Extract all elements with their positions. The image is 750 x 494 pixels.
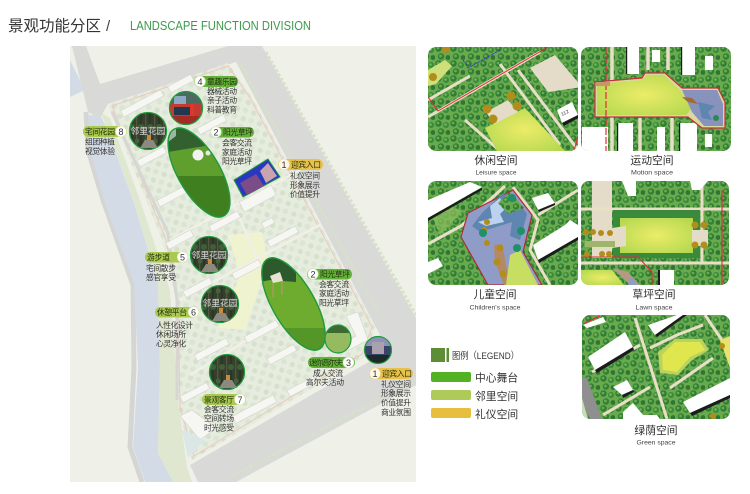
heading: motion space: Motion space [631, 170, 673, 176]
site west road [112, 112, 177, 400]
callout 3: mini golf: 成人交流 [313, 368, 343, 378]
photo circle: forest garden 5 [190, 236, 228, 274]
heading: children's space: 儿童空间 [473, 287, 517, 301]
callout 7: landscape lounge: 会客交流 [204, 404, 234, 414]
callout 6: rest platform: 心灵净化 [156, 338, 186, 348]
panel: children's space plan [428, 181, 578, 285]
callout 1: entrance north: 礼仪空间 [290, 170, 320, 180]
photo: entrance north [234, 159, 280, 197]
photo circle: forest garden 6: 邻里花园 [202, 297, 238, 308]
callout 8: home garden: 8 [118, 127, 124, 137]
title: LANDSCAPE FUNCTION DIVISION [130, 18, 311, 33]
callout 6: rest platform: 休闲场所 [156, 329, 186, 339]
callout 1: entrance south: 商业氛围 [381, 407, 411, 417]
heading: motion space [630, 153, 674, 176]
residential buildings [121, 74, 368, 440]
callout 5: walkway: 5 [180, 252, 185, 262]
callout 7: landscape lounge [202, 394, 246, 432]
callout 3: mini golf: 高尔夫活动 [306, 377, 344, 387]
callout 6: rest platform: 休憩平台 [157, 307, 187, 317]
callout 6: rest platform: 人性化设计 [156, 320, 193, 330]
central yellow lawn [218, 232, 268, 330]
river curb [86, 112, 142, 482]
photo circle: forest garden 8: 邻里花园 [130, 125, 166, 136]
callout 7: landscape lounge: 景观客厅 [204, 394, 234, 404]
heading: leisure space: 休闲空间 [474, 153, 518, 167]
callout 5: walkway: 游步道 [147, 252, 170, 262]
callout 2: sunny lawn south: 会客交流 [319, 279, 349, 289]
callout 2: sunny lawn north: 阳光草坪 [223, 127, 253, 137]
heading: lawn space: Lawn space [636, 304, 673, 312]
photo circle: forest garden 6 [202, 286, 238, 322]
heading: lawn space [632, 287, 676, 312]
callout 8: home garden: 视觉体验 [85, 146, 115, 156]
site landscape [108, 63, 375, 460]
legend: 礼仪空间 [475, 407, 518, 421]
callout 2: sunny lawn south: 阳光草坪 [319, 298, 349, 308]
photo circle: forest garden 7 [210, 354, 244, 390]
panel: leisure space plan: 112 [560, 109, 570, 118]
callout 8: home garden: 组团种植 [85, 136, 115, 146]
callout 6: rest platform: 6 [191, 308, 196, 318]
callout 2: sunny lawn north: 2 [213, 128, 219, 138]
callout 3: mini golf: 迷你高尔夫 [309, 358, 343, 368]
callout 2: sunny lawn south: 家庭活动 [319, 288, 349, 298]
heading: children's space: Children's space [470, 304, 521, 312]
callout 1: entrance south: 迎宾入口 [382, 368, 412, 378]
callout 1: entrance north: 迎宾入口 [291, 160, 321, 170]
callout 2: sunny lawn south: 阳光草坪 [320, 269, 350, 279]
title [8, 17, 311, 35]
callout 1: entrance north [278, 159, 323, 199]
callout 1: entrance south: 价值提升 [381, 398, 411, 408]
callout 2: sunny lawn south [307, 269, 352, 308]
heading: green space: Green space [636, 440, 676, 446]
callout 6: rest platform [155, 307, 199, 348]
callout 2: sunny lawn north: 阳光草坪 [222, 156, 252, 166]
photo circle: forest garden 8 [130, 112, 166, 150]
panel: motion space plan [581, 47, 731, 151]
callout 1: entrance south: 礼仪空间 [381, 379, 411, 389]
heading: leisure space [474, 153, 518, 176]
callout 7: landscape lounge: 时光感受 [204, 422, 234, 432]
tree rows along roads [232, 52, 416, 476]
callout 2: sunny lawn north [211, 127, 254, 166]
panel: leisure space plan [428, 45, 582, 151]
callout 5: walkway [145, 252, 188, 282]
callout 4: children's garden: 亲子活动 [207, 95, 237, 105]
callout 3: mini golf: 3 [346, 358, 351, 368]
legend [431, 348, 519, 421]
photo circle: forest garden 5: 邻里花园 [191, 249, 227, 260]
clubhouse forecourt [182, 430, 205, 458]
heading: green space [634, 423, 678, 446]
callout 5: walkway: 感官享受 [146, 272, 176, 282]
callout 7: landscape lounge: 空间转场 [204, 413, 234, 423]
callout 1: entrance north: 1 [281, 160, 287, 170]
photo circle: children's garden [169, 91, 203, 125]
callout 1: entrance south: 形象展示 [381, 388, 411, 398]
heading: children's space [470, 287, 521, 312]
callout 3: mini golf [306, 357, 355, 387]
panel: site master plan [70, 46, 416, 482]
callout 1: entrance south: 1 [372, 369, 378, 379]
legend: 图例（LEGEND） [452, 350, 519, 362]
riverside green strip [100, 112, 192, 482]
heading: leisure space: Leisure space [476, 170, 517, 176]
title: 景观功能分区 [8, 17, 101, 35]
river [70, 60, 173, 482]
callout 8: home garden: 宅间花园 [85, 126, 115, 136]
callout 1: entrance south [369, 368, 413, 417]
title: / [106, 18, 111, 35]
roads [72, 46, 416, 482]
callout 4: children's garden: 4 [197, 77, 203, 87]
heading: motion space: 运动空间 [630, 153, 674, 167]
callout 5: walkway: 宅间散步 [146, 263, 176, 273]
heading: green space: 绿荫空间 [634, 423, 678, 437]
legend: 邻里空间 [475, 389, 518, 403]
callout 2: sunny lawn north: 家庭活动 [222, 147, 252, 157]
internal paths [170, 170, 345, 375]
photo circle: mini golf [325, 325, 351, 353]
photo ellipse: sunny lawn north [167, 127, 231, 218]
site pink boundary [112, 66, 372, 456]
panel: green space plan [582, 315, 730, 419]
callout 4: children's garden [194, 76, 238, 114]
photo circle: entrance south [364, 336, 392, 364]
callout 1: entrance north: 形象展示 [290, 180, 320, 190]
callout 4: children's garden: 器械活动 [207, 86, 237, 96]
callout 2: sunny lawn south: 2 [310, 270, 316, 280]
callout 7: landscape lounge: 7 [237, 395, 243, 405]
panel: lawn space plan [581, 181, 729, 285]
heading: lawn space: 草坪空间 [632, 287, 676, 301]
callout 4: children's garden: 科普教育 [207, 104, 237, 114]
callout 8: home garden [83, 126, 127, 156]
photo ellipse: sunny lawn south [261, 257, 326, 351]
callout 4: children's garden: 童趣乐园 [207, 76, 237, 86]
callout 1: entrance north: 价值提升 [290, 189, 320, 199]
legend: 中心舞台 [475, 370, 518, 384]
callout 2: sunny lawn north: 会客交流 [222, 138, 252, 148]
